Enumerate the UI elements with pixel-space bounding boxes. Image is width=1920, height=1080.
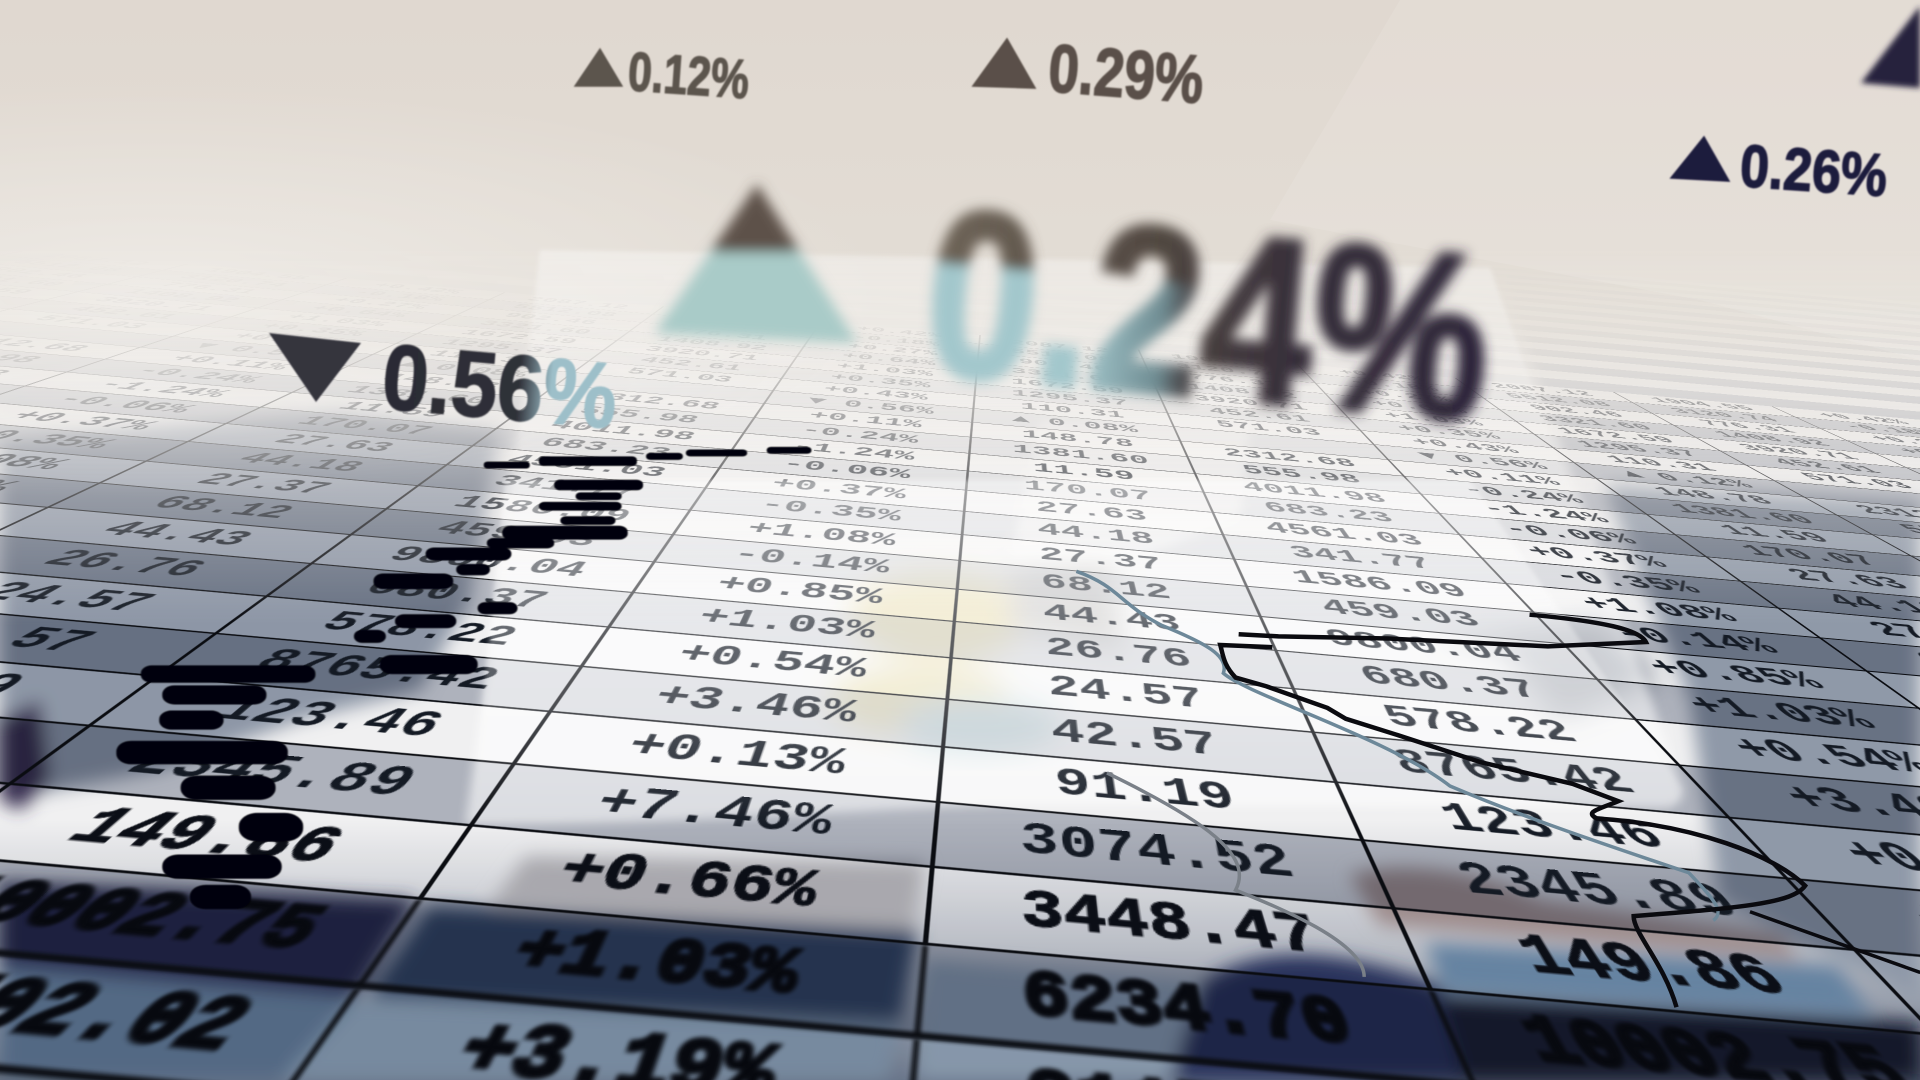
data table text and grid lines in perspective: 91.19 — [1053, 761, 1242, 822]
data table text and grid lines in perspective: 9800.04 — [377, 542, 594, 583]
data table text and grid lines in perspective: -0.18% — [1345, 377, 1442, 393]
data table text and grid lines in perspective: 452.61 — [1206, 406, 1314, 425]
data table text and grid lines in perspective: 2087.12 — [523, 296, 632, 310]
data table text and grid lines in perspective: 555.98 — [573, 404, 702, 426]
data table text and grid lines in perspective: 571.03 — [1794, 470, 1920, 492]
data table text and grid lines in perspective: 3120.74 — [172, 273, 293, 288]
data table text and grid lines in perspective: 3120.74 — [1174, 362, 1282, 379]
data table text and grid lines in perspective: 170.07 — [1733, 541, 1890, 571]
data table text and grid lines in perspective: +0.43% — [821, 383, 929, 403]
data table text and grid lines in perspective: ▼ 0.56% — [1413, 449, 1554, 473]
data table text and grid lines in perspective: +0.54% — [670, 637, 870, 686]
data table text and grid lines in perspective: +0.11% — [1439, 465, 1567, 489]
data table text and grid lines in perspective: 149.86 — [45, 799, 358, 879]
data table text and grid lines in perspective: 902.46 — [1018, 357, 1110, 373]
data table text and grid lines in perspective: 2087.12 — [1010, 338, 1111, 354]
data table text and grid lines in perspective: 3920.71 — [84, 296, 221, 313]
label: large up 0.24%: 0.24% — [917, 160, 1500, 472]
data table text and grid lines in perspective: 1904.55 — [197, 267, 315, 281]
label: up 0.29%: 0.29% — [1046, 30, 1206, 118]
data table text and grid lines in perspective: 2312.68 — [1221, 446, 1361, 470]
data table text and grid lines in perspective: 5512.08 — [1011, 347, 1114, 364]
data table text and grid lines in perspective: 3321.60 — [474, 319, 595, 336]
data table text and grid lines in perspective: +7.46% — [584, 778, 837, 849]
data table text and grid lines in perspective: 578.22 — [307, 606, 526, 654]
data table text and grid lines in perspective: 5512.08 — [1501, 391, 1618, 409]
data table text and grid lines in perspective: -0.06% — [43, 392, 202, 416]
data table text and grid lines in perspective: 776.31 — [672, 327, 770, 342]
data table text and grid lines in perspective: -0.06% — [1497, 520, 1645, 549]
data table text and grid lines in perspective: 3120.74 — [675, 318, 784, 334]
data table text and grid lines in perspective: +0.11% — [806, 409, 923, 431]
data table text and grid lines in perspective: 2312.68 — [581, 389, 723, 412]
data table text and grid lines in perspective: 1408.92 — [1185, 382, 1301, 401]
data table text and grid lines in perspective: -0.14% — [727, 543, 892, 579]
data table text and grid lines in perspective: 902.46 — [499, 311, 601, 326]
data table text and grid lines in perspective: +1.08% — [742, 518, 898, 551]
label: up 0.12% — [575, 40, 751, 110]
data table text and grid lines in perspective: +0.11% — [160, 353, 297, 373]
data table text and grid lines in perspective: 170.07 — [1023, 477, 1154, 505]
label: up 0.12%: 0.12% — [626, 40, 751, 110]
data table text and grid lines in perspective: 68.12 — [1040, 570, 1174, 605]
data table text and grid lines in perspective: +0.37% — [0, 408, 165, 434]
data table text and grid lines in perspective — [0, 253, 1920, 1080]
data table text and grid lines in perspective: 4011.98 — [544, 418, 699, 444]
data table text and grid lines in perspective: 683.23 — [533, 435, 675, 461]
data table text and grid lines in perspective: 776.31 — [1694, 418, 1803, 435]
data table text and grid lines in perspective: 148.78 — [375, 372, 506, 392]
data table text and grid lines in perspective: +0.13% — [617, 724, 850, 786]
data table text and grid lines in perspective: +0.64% — [1367, 398, 1472, 416]
data table text and grid lines in perspective: +0.64% — [840, 351, 936, 368]
data table text and grid lines in perspective: 26.76 — [1044, 632, 1196, 675]
data table text and grid lines in perspective: 2087.12 — [1487, 381, 1599, 398]
data table text and grid lines in perspective: +0.35% — [252, 322, 372, 338]
data table text and grid lines in perspective: +1.03% — [496, 916, 805, 1014]
data table text and grid lines in perspective: ▼ 0.56% — [184, 341, 332, 361]
data table text and grid lines in perspective: 341.77 — [1285, 542, 1439, 575]
data table text and grid lines in perspective: 110.31 — [1601, 453, 1724, 474]
label: up 0.26%: 0.26% — [1738, 132, 1889, 209]
label: up 0.26% — [1671, 132, 1889, 209]
data table text and grid lines in perspective: 11.59 — [330, 399, 453, 421]
data table text and grid lines in perspective: +0.42% — [1335, 368, 1429, 383]
data table text and grid lines in perspective: +0.85% — [1638, 653, 1837, 697]
data table text and grid lines in perspective: 680.37 — [352, 573, 555, 616]
data table text and grid lines in perspective: -1.24% — [1476, 500, 1616, 527]
data table text and grid lines in perspective: 9800.04 — [1320, 624, 1532, 669]
data table text and grid lines in perspective: +0.42% — [367, 282, 466, 295]
data table text and grid lines in perspective: 776.31 — [1187, 372, 1283, 389]
data table text and grid lines in perspective: ▼ 0.56% — [805, 395, 935, 417]
data table text and grid lines in perspective: 1586.09 — [1287, 566, 1475, 604]
data table text and grid lines in perspective: 148.78 — [1647, 484, 1782, 508]
data table text and grid lines in perspective: 4561.03 — [1261, 518, 1430, 551]
data table text and grid lines in perspective: 1381.60 — [339, 384, 495, 407]
data table text and grid lines in perspective: 3321.60 — [1534, 413, 1659, 433]
data table text and grid lines in perspective: 3321.60 — [1011, 366, 1122, 385]
data table text and grid lines in perspective: 459.03 — [426, 517, 604, 552]
label: large up 0.24% — [652, 179, 1494, 432]
data table text and grid lines in perspective: 3120.74 — [1665, 406, 1785, 424]
data table text and grid lines in perspective: 44.18 — [227, 450, 372, 476]
data table text and grid lines in perspective: +0.35% — [828, 372, 932, 390]
data table text and grid lines in perspective: 110.31 — [1020, 401, 1126, 421]
data table text and grid lines in perspective: 3074.52 — [1019, 814, 1302, 892]
data table text and grid lines in perspective: 123.46 — [197, 688, 454, 748]
data table text and grid lines in perspective: ▲ 0.12% — [1614, 467, 1761, 492]
data table text and grid lines in perspective: 44.18 — [1037, 520, 1157, 549]
data table text and grid lines in perspective: 571.03 — [1214, 418, 1325, 439]
icon: corner triangle — [1861, 6, 1920, 88]
data table text and grid lines in perspective: 1672.59 — [1011, 377, 1126, 396]
data table text and grid lines in perspective: +0.43% — [1407, 436, 1525, 457]
data table text and grid lines in perspective: -0.35% — [756, 495, 903, 526]
data table text and grid lines in perspective: -1.24% — [789, 439, 916, 464]
data table text and grid lines in perspective: 571.03 — [622, 366, 735, 385]
data table text and grid lines in perspective: +0.43% — [223, 331, 348, 349]
data table text and grid lines in perspective: 1381.60 — [1664, 501, 1825, 528]
data table text and grid lines in perspective: 44.43 — [1042, 599, 1185, 638]
data table text and grid lines in perspective: 27.37 — [185, 470, 339, 499]
data table text and grid lines in perspective: 1904.55 — [1169, 353, 1273, 369]
data table text and grid lines in perspective: 26.76 — [27, 545, 217, 584]
data table text and grid lines in perspective: 110.31 — [423, 349, 542, 367]
data table text and grid lines in perspective: 8765.42 — [1385, 742, 1648, 804]
data table text and grid lines in perspective: 149.86 — [1506, 924, 1808, 1013]
data table text and grid lines in perspective: +0.27% — [845, 342, 939, 358]
data table text and grid lines in perspective: 2345.89 — [1447, 853, 1759, 933]
data table text and grid lines in perspective: 2087.12 — [35, 253, 156, 267]
data table text and grid lines in perspective: 27.63 — [1035, 498, 1150, 525]
data table text and grid lines in perspective: 4011.98 — [1239, 479, 1392, 507]
floating percentage labels — [268, 4, 1920, 432]
data table text and grid lines in perspective: +1.03% — [278, 313, 393, 328]
data table text and grid lines in perspective: 1381.60 — [1012, 442, 1151, 468]
data table text and grid lines in perspective: 68.12 — [138, 492, 303, 524]
data table text and grid lines in perspective: 3920.71 — [1732, 442, 1867, 463]
data table text and grid lines in perspective: +0.27% — [1356, 387, 1457, 404]
data table text and grid lines in perspective: 170.07 — [288, 414, 439, 438]
data table text and grid lines in perspective: +0.85% — [711, 571, 885, 611]
data table text and grid lines in perspective: 3448.47 — [1021, 881, 1330, 970]
data table text and grid lines in perspective: 148.78 — [1021, 428, 1136, 450]
data table text and grid lines in perspective: 44.43 — [86, 517, 263, 552]
data table text and grid lines in perspective: ▲ 0.08% — [1012, 413, 1140, 436]
data table text and grid lines in perspective: +0.66% — [544, 841, 822, 924]
data table text and grid lines in perspective: +1.03% — [692, 602, 878, 646]
data table text and grid lines in perspective: 341.77 — [485, 472, 643, 502]
data table text and grid lines in perspective: 1408.92 — [116, 288, 246, 304]
data table text and grid lines in perspective: 1672.59 — [1552, 425, 1682, 446]
data table text and grid lines in perspective: 3920.71 — [641, 344, 762, 363]
label: up 0.29% — [973, 30, 1206, 118]
data table text and grid lines in perspective: 1295.37 — [1571, 438, 1706, 460]
data table text and grid lines in perspective: 683.23 — [1260, 499, 1399, 527]
data table text and grid lines in perspective: 578.22 — [1376, 699, 1588, 752]
data table text and grid lines in perspective: 11.59 — [1712, 522, 1841, 547]
data table text and grid lines in perspective: ▲ 0.08% — [391, 359, 533, 380]
data table text and grid lines in perspective: 27.63 — [1778, 565, 1920, 595]
data table text and grid lines in perspective: 27.37 — [1038, 544, 1165, 576]
label: down 0.56%: 0.56% — [378, 324, 621, 448]
data table text and grid lines in perspective: 571.03 — [24, 314, 155, 331]
data table text and grid lines in perspective: 123.46 — [1431, 795, 1680, 862]
data table text and grid lines in perspective: 680.37 — [1353, 660, 1551, 707]
data table text and grid lines in perspective: 11.59 — [1033, 460, 1137, 484]
data table text and grid lines in perspective: 452.61 — [636, 355, 745, 373]
data table text and grid lines in perspective: 5512.08 — [507, 303, 621, 318]
data table text and grid lines in perspective: 24.57 — [1047, 670, 1209, 718]
data table text and grid lines in perspective: 1408.92 — [653, 335, 770, 352]
data table text and grid lines in perspective: 4561.03 — [499, 452, 671, 481]
data table text and grid lines in perspective: -1.24% — [85, 378, 236, 400]
data table text and grid lines in perspective: 459.03 — [1315, 595, 1489, 633]
label: large up 0.24%: 0.24% — [917, 160, 1500, 472]
data table text and grid lines in perspective: -0.06% — [779, 456, 912, 483]
data table text and grid lines in perspective: 902.46 — [1525, 403, 1630, 420]
label: down 0.56% — [269, 324, 621, 448]
data table text and grid lines in perspective: -0.18% — [850, 333, 941, 348]
data table text and grid lines in perspective: 1295.37 — [435, 338, 566, 356]
data table text and grid lines in perspective: -0.18% — [347, 289, 450, 303]
data table text and grid lines in perspective: +0.27% — [325, 296, 432, 311]
data table text and grid lines in perspective: -0.24% — [798, 423, 920, 447]
data table text and grid lines in perspective: +1.08% — [1573, 592, 1748, 628]
data table text and grid lines in perspective: 1904.55 — [685, 310, 791, 325]
data table text and grid lines in perspective: 452.61 — [1766, 456, 1890, 477]
data table text and grid lines in perspective: 3920.71 — [1191, 393, 1311, 413]
data table text and grid lines in perspective: 1408.92 — [1709, 429, 1838, 449]
data table text and grid lines in perspective: +1.03% — [834, 361, 934, 379]
data table text and grid lines in perspective: +0.42% — [1811, 411, 1917, 427]
data table text and grid lines in perspective: 27.63 — [265, 431, 401, 456]
data table text and grid lines in perspective: 6234.70 — [1022, 960, 1364, 1065]
data table text and grid lines in perspective: -0.24% — [124, 365, 268, 386]
data table text and grid lines in perspective: 2345.89 — [107, 737, 429, 810]
data table text and grid lines in perspective: +1.03% — [1676, 689, 1890, 738]
data table text and grid lines in perspective: 1295.37 — [1011, 388, 1130, 408]
data table text and grid lines in perspective: 776.31 — [152, 281, 263, 295]
data table text and grid lines in perspective: 42.57 — [1050, 712, 1224, 766]
data table text and grid lines in perspective: +1.03% — [1380, 410, 1488, 429]
table row fills in perspective — [0, 358, 1920, 1080]
data table text and grid lines in perspective: +0.37% — [1520, 542, 1676, 573]
data table text and grid lines in perspective: 1904.55 — [1645, 396, 1761, 413]
data table text and grid lines in perspective: +0.35% — [1393, 422, 1506, 442]
data table text and grid lines in perspective: 5512.08 — [4, 259, 130, 273]
data table text and grid lines in perspective: +3.46% — [646, 678, 860, 733]
data table text and grid lines in perspective: +0.42% — [855, 325, 943, 339]
data table text and grid lines in perspective: -0.14% — [1603, 621, 1790, 661]
data table text and grid lines in perspective: 1586.09 — [445, 492, 636, 527]
data table text and grid lines in perspective: 1672.59 — [455, 328, 581, 346]
data table text and grid lines in perspective: +0.37% — [768, 475, 908, 503]
data table text and grid lines in perspective: -0.24% — [1456, 482, 1590, 507]
data table text and grid lines in perspective: 452.61 — [60, 305, 185, 321]
data table text and grid lines in perspective: -0.35% — [1545, 565, 1710, 599]
data table text and grid lines in perspective: 8765.42 — [239, 643, 509, 699]
data table text and grid lines in perspective: +0.64% — [303, 304, 413, 319]
data table text and grid lines in perspective: 555.98 — [1239, 463, 1366, 487]
